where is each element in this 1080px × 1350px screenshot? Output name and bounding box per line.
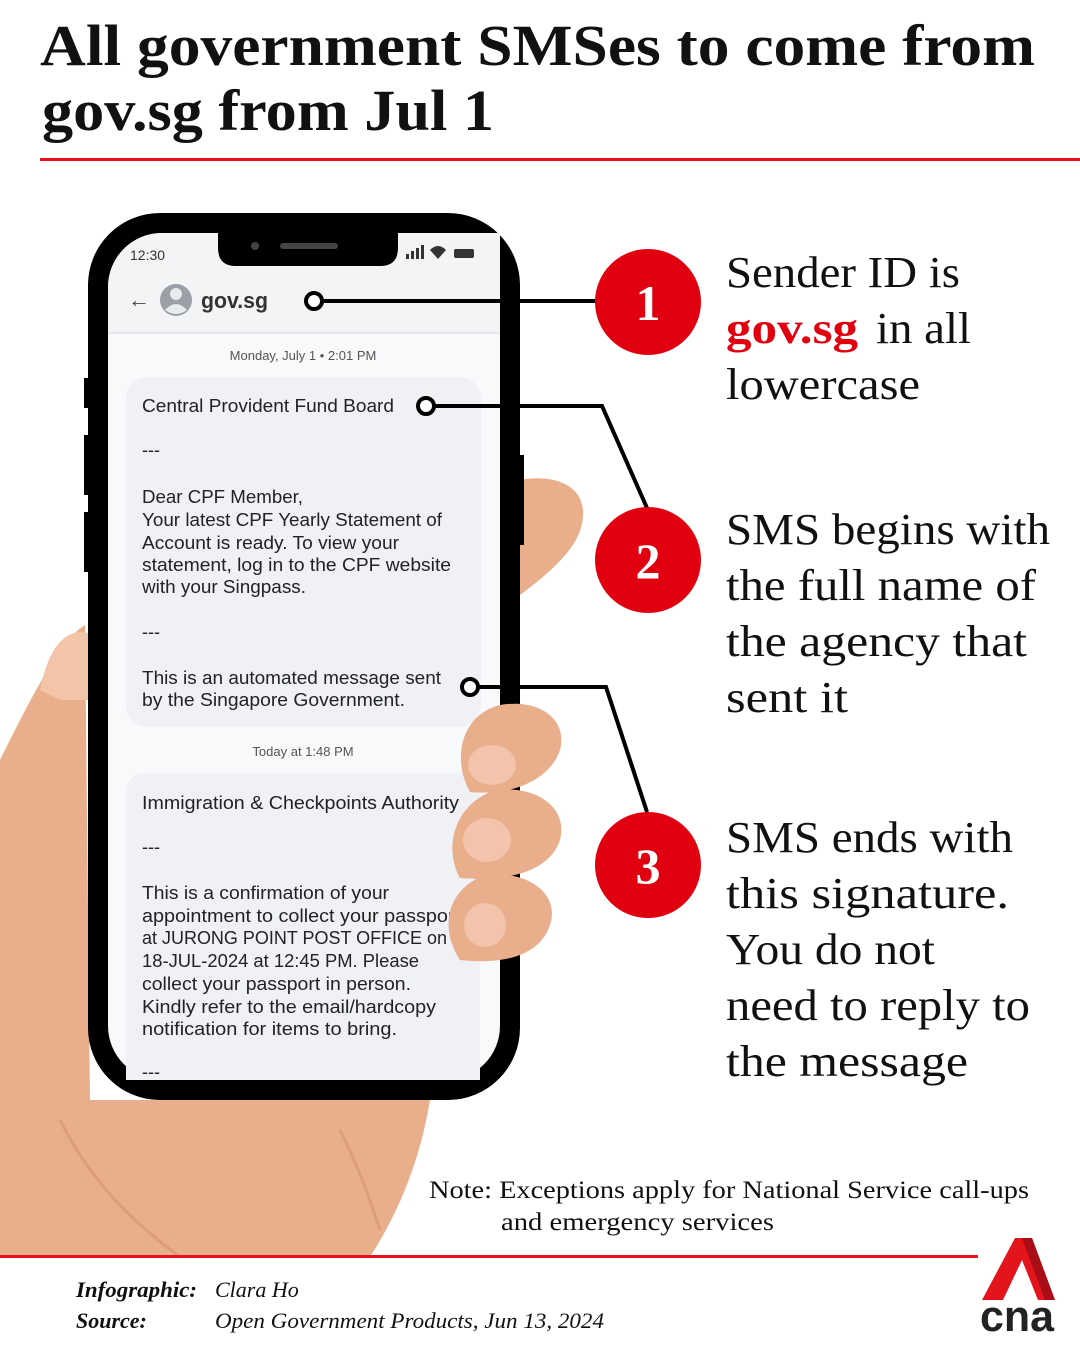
callout 1: 1 bbox=[636, 275, 660, 331]
phone bbox=[84, 213, 524, 1100]
callout 3: need to reply to bbox=[726, 981, 1030, 1030]
header: gov.sg: gov.sg bbox=[201, 288, 268, 313]
callout 3 bbox=[595, 812, 1030, 1086]
callout 3: SMS ends with bbox=[726, 813, 1013, 862]
message bubble 1: Account is ready. To view your bbox=[142, 533, 399, 553]
note bbox=[429, 1177, 1029, 1236]
callout 1: in all bbox=[876, 304, 971, 353]
message bubble 2 bbox=[126, 773, 480, 1082]
message bubble 1 bbox=[126, 377, 481, 727]
message bubble 1: --- bbox=[142, 440, 160, 460]
callout 2: the full name of bbox=[726, 561, 1036, 610]
message bubble 2: This is a confirmation of your bbox=[142, 883, 389, 903]
message bubble 1: statement, log in to the CPF website bbox=[142, 555, 451, 575]
callout 1 bbox=[595, 248, 971, 409]
message bubble 1: This is an automated message sent bbox=[142, 668, 441, 688]
message bubble 1: Dear CPF Member, bbox=[142, 487, 303, 507]
connector arrows bbox=[306, 293, 647, 812]
message bubble 2: --- bbox=[142, 837, 160, 857]
callout 3: 3 bbox=[636, 838, 660, 894]
callout 2: the agency that bbox=[726, 617, 1027, 666]
credits: Source: bbox=[76, 1308, 147, 1333]
callout 2: SMS begins with bbox=[726, 505, 1050, 554]
header: gov.sg: ← bbox=[128, 287, 150, 312]
title bbox=[40, 13, 1035, 143]
message bubble 1: Your latest CPF Yearly Statement of bbox=[142, 510, 443, 530]
message bubble 1: --- bbox=[142, 622, 160, 642]
message bubble 2: 18-JUL-2024 at 12:45 PM. Please bbox=[142, 951, 419, 971]
header: gov.sg bbox=[128, 284, 268, 316]
callout 1: lowercase bbox=[726, 360, 920, 409]
callout 1: gov.sg bbox=[726, 304, 858, 353]
callout 2: sent it bbox=[726, 673, 848, 722]
fingers over phone bbox=[449, 704, 561, 961]
status bar bbox=[130, 245, 474, 263]
note: and emergency services bbox=[501, 1209, 774, 1236]
message bubble 2: collect your passport in person. bbox=[142, 974, 411, 994]
credits bbox=[75, 1277, 604, 1333]
title: gov.sg from Jul 1 bbox=[42, 78, 494, 143]
credits: Clara Ho bbox=[215, 1277, 299, 1302]
message bubble 2: notification for items to bring. bbox=[142, 1019, 397, 1039]
message bubble 2: --- bbox=[142, 1062, 160, 1082]
message bubble 1: Central Provident Fund Board bbox=[142, 396, 394, 416]
message bubble 2: appointment to collect your passport bbox=[142, 906, 460, 926]
logo: cna: cna bbox=[980, 1292, 1055, 1341]
message bubble 1: with your Singpass. bbox=[141, 577, 306, 597]
message bubble 2: at JURONG POINT POST OFFICE on bbox=[142, 928, 447, 948]
message bubble 1: by the Singapore Government. bbox=[142, 690, 405, 710]
title: All government SMSes to come from bbox=[40, 13, 1035, 78]
callout 3: You do not bbox=[726, 925, 935, 974]
phone: Today at 1:48 PM bbox=[252, 744, 354, 759]
phone: Monday, July 1 • 2:01 PM bbox=[230, 348, 376, 363]
status bar: 12:30 bbox=[130, 247, 165, 263]
callout 3: this signature. bbox=[726, 869, 1009, 918]
message bubble 2: Immigration & Checkpoints Authority bbox=[142, 793, 459, 813]
note: Note: Exceptions apply for National Service call-ups bbox=[429, 1177, 1029, 1204]
callout 2 bbox=[595, 505, 1050, 722]
callout 3: the message bbox=[726, 1037, 968, 1086]
credits: Infographic: bbox=[75, 1277, 197, 1302]
logo: cna bbox=[980, 1238, 1055, 1341]
illustration: hand bbox=[0, 478, 583, 1257]
message bubble 2: Kindly refer to the email/hardcopy bbox=[142, 997, 436, 1017]
credits: Open Government Products, Jun 13, 2024 bbox=[215, 1308, 604, 1333]
notch bbox=[218, 233, 398, 266]
callout 1: Sender ID is bbox=[726, 248, 960, 297]
callout 2: 2 bbox=[636, 533, 660, 589]
